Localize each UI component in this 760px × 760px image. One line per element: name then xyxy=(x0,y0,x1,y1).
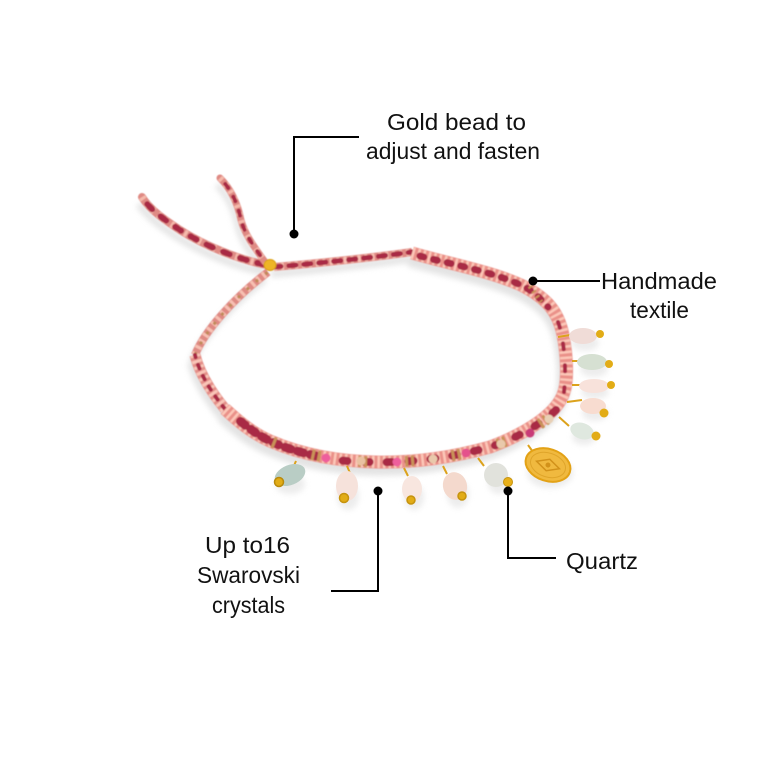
tail strand left xyxy=(142,197,267,265)
bead: grey xyxy=(484,463,508,487)
bead: white drop xyxy=(336,471,358,501)
callout: swarovski crystals xyxy=(197,486,382,618)
leader line xyxy=(294,137,359,234)
wide woven band xyxy=(225,253,567,462)
label: adjust and fasten xyxy=(366,138,540,164)
leader line xyxy=(331,491,378,591)
bead: right 2 xyxy=(577,354,607,370)
quartz beads xyxy=(271,328,615,510)
gold links xyxy=(293,335,582,476)
leader line xyxy=(533,280,600,282)
bead: right 1 xyxy=(569,328,597,344)
callout: handmade textile xyxy=(528,268,717,323)
label: Swarovski xyxy=(197,562,300,588)
bead: white xyxy=(402,476,422,502)
bead: green left xyxy=(271,460,309,490)
swarovski crystals xyxy=(322,414,554,466)
callout: quartz xyxy=(504,486,638,574)
bracelet xyxy=(139,178,615,510)
label: Up to16 xyxy=(205,532,290,558)
bead: right 4 xyxy=(580,398,606,414)
bead: right 3 xyxy=(579,379,609,393)
gold medal charm xyxy=(521,443,575,487)
bead: pink xyxy=(440,469,470,503)
label: Handmade xyxy=(601,268,717,294)
left tapered band xyxy=(195,272,268,409)
label: crystals xyxy=(212,592,285,618)
callout: gold bead xyxy=(290,109,540,238)
label: textile xyxy=(630,297,689,323)
bead: right 5 xyxy=(568,420,596,442)
gold bead fastener xyxy=(264,260,276,270)
thin top band xyxy=(274,252,412,267)
leader line xyxy=(508,491,556,558)
tail strand right xyxy=(220,178,265,262)
label: Gold bead to xyxy=(387,109,526,135)
bracelet shadow xyxy=(139,185,564,469)
label: Quartz xyxy=(566,548,638,574)
